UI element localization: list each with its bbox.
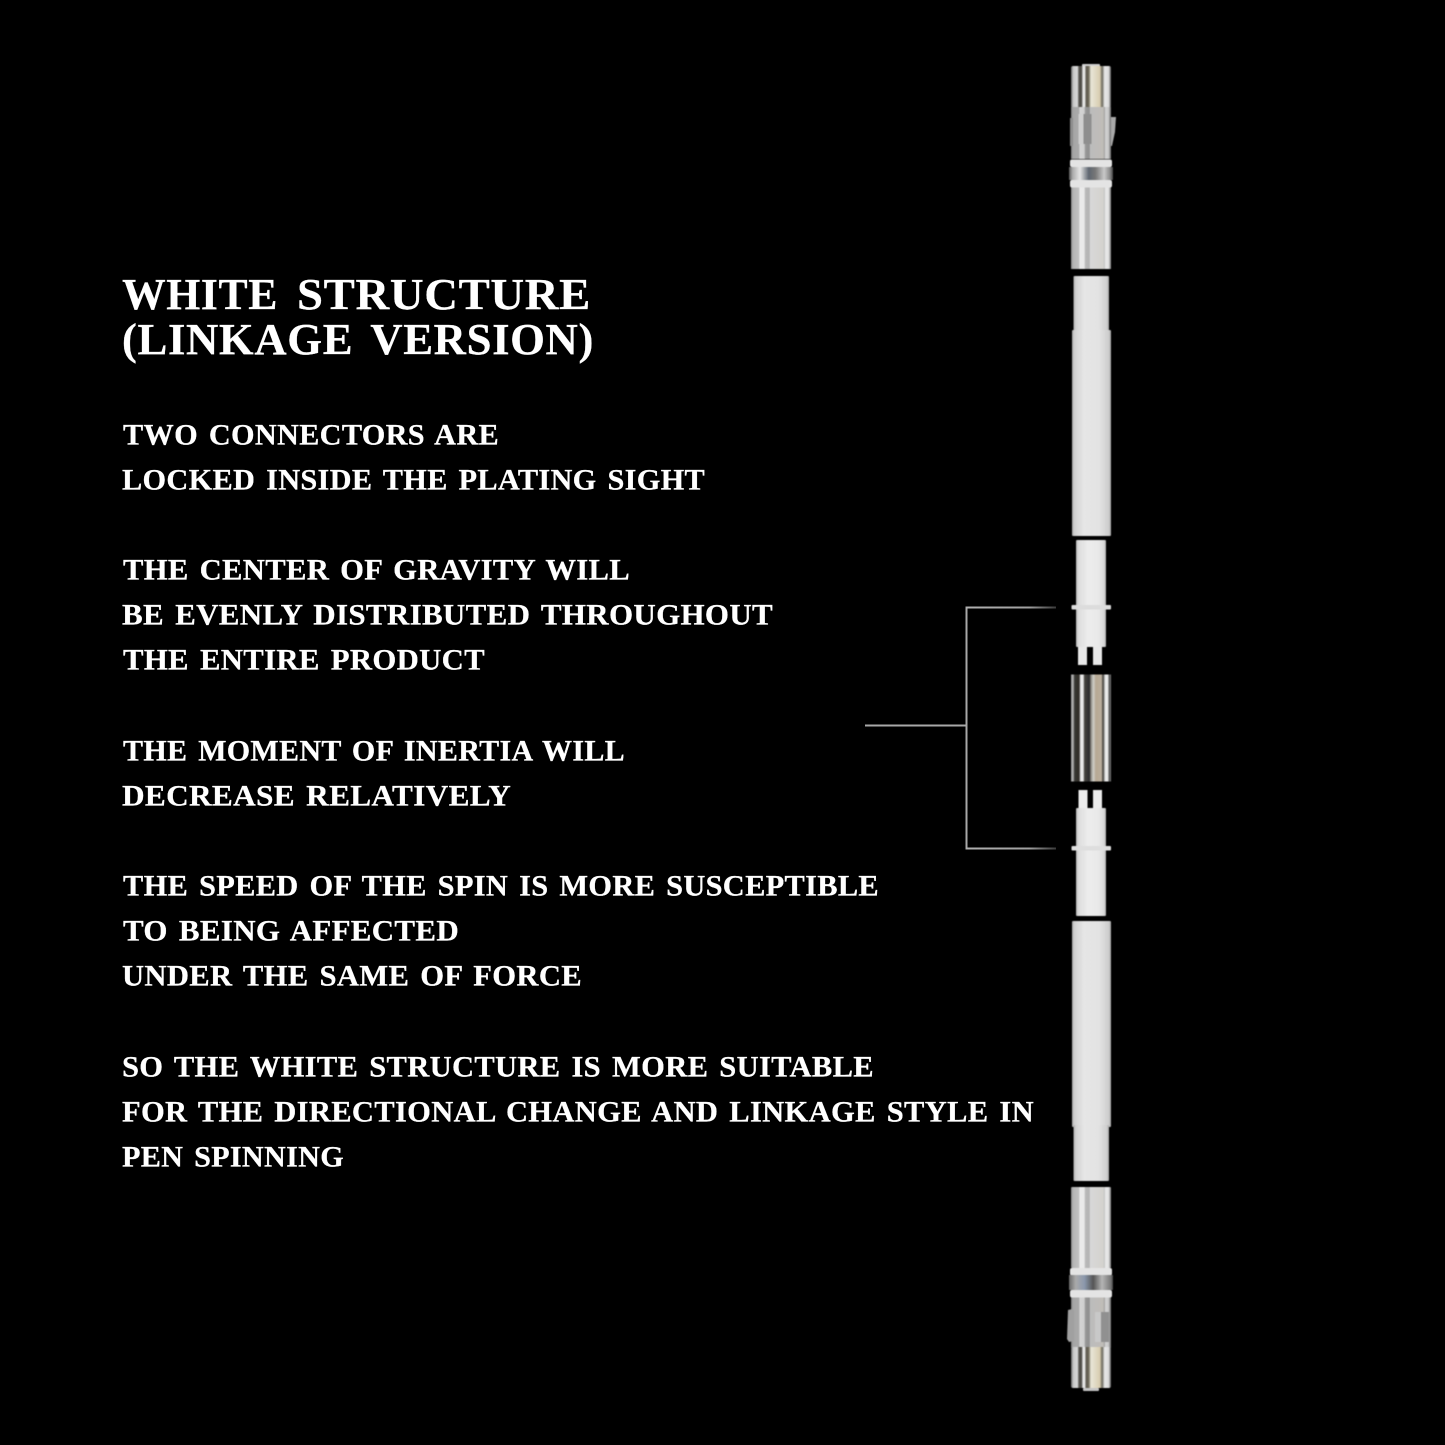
pen: metal center tube [1071,674,1111,782]
text block: moment of inertia: THE MOMENT OF INERTIA WILL [123,734,625,768]
text block: spin speed [122,870,879,992]
text block: spin speed: THE SPEED OF THE SPIN IS MORE SUSCEPTIBLE [123,870,879,902]
text block: moment of inertia: DECREASE RELATIVELY [122,780,511,812]
text block: center of gravity [122,554,773,676]
text block: center of gravity: THE CENTER OF GRAVITY WILL [123,554,630,586]
text block: connectors: TWO CONNECTORS ARE [123,418,499,452]
title: (LINKAGE VERSION) [122,315,594,364]
pen: upper white body [1072,276,1111,536]
text block: conclusion: FOR THE DIRECTIONAL CHANGE AND LINKAGE STYLE IN [122,1096,1034,1128]
pen: top cap [1069,64,1116,269]
title [122,270,594,364]
pen: upper connector [1072,540,1111,665]
text block: connectors: LOCKED INSIDE THE PLATING SIGHT [122,464,705,496]
bracket callout lines [865,606,1056,850]
text block: spin speed: TO BEING AFFECTED [123,914,459,948]
title: STRUCTURE [297,270,591,319]
text block: moment of inertia [122,734,625,812]
text block: conclusion: SO THE WHITE STRUCTURE IS MORE SUITABLE [122,1050,874,1084]
text block: connectors [122,418,705,496]
text block: center of gravity: BE EVENLY DISTRIBUTED THROUGHOUT [122,598,773,632]
title: WHITE [122,270,278,319]
text block: center of gravity: THE ENTIRE PRODUCT [123,644,485,676]
text block: conclusion: PEN SPINNING [122,1140,344,1174]
pen: lower white body [1072,921,1111,1181]
pen: lower connector [1072,790,1111,916]
pen: bottom cap [1067,1187,1113,1391]
text block: conclusion [122,1050,1034,1174]
text block: spin speed: UNDER THE SAME OF FORCE [122,960,582,992]
